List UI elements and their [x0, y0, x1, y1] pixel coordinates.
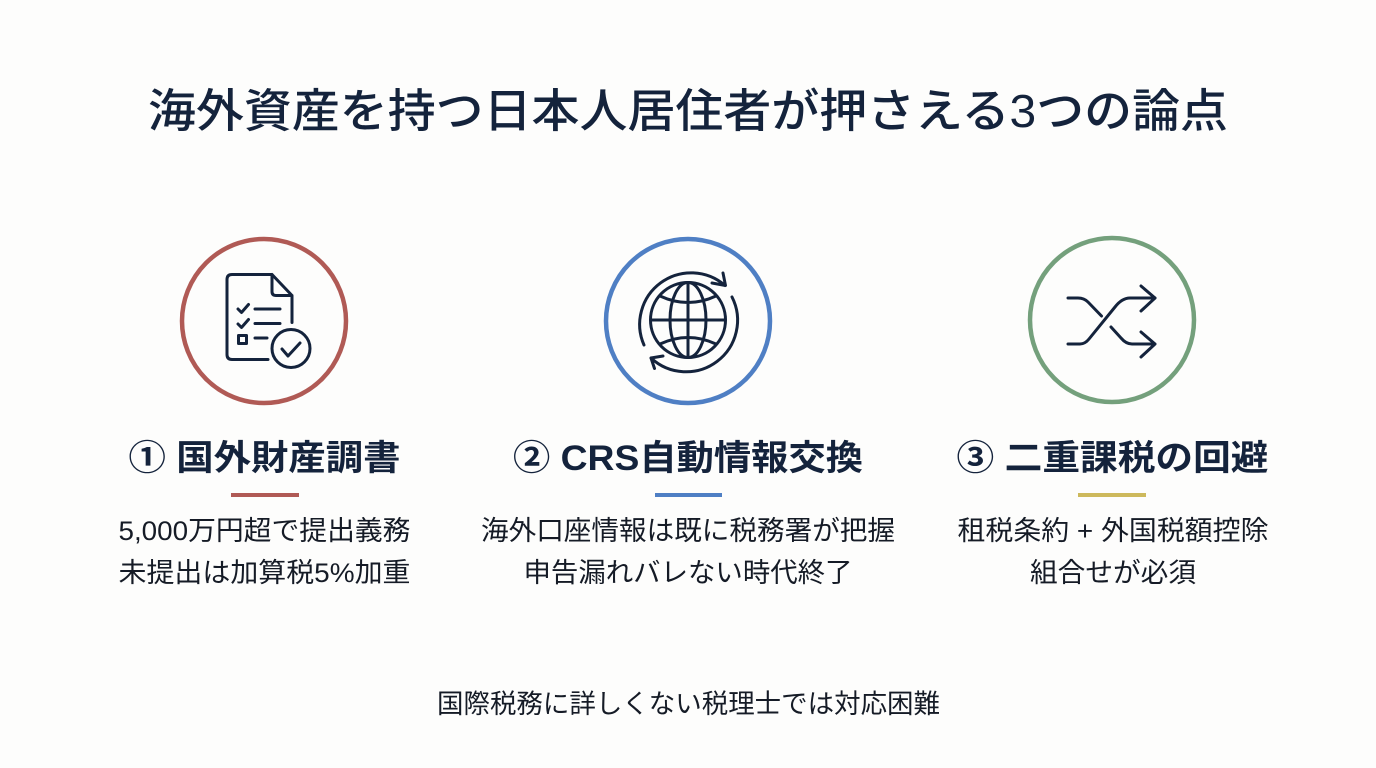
icon: crossing arrows [1030, 238, 1194, 402]
title: 海外資産を持つ日本人居住者が押さえる3つの論点 [148, 85, 1228, 137]
text block: 未提出は加算税5%加重 [118, 558, 410, 588]
panel: 二重課税の回避 [956, 238, 1268, 588]
panel: CRS自動情報交換 [481, 239, 895, 588]
panel: 国外財産調書 [118, 239, 410, 588]
text block: 組合せが必須 [1030, 558, 1196, 588]
accent rule [231, 493, 299, 497]
text block: 申告漏れバレない時代終了 [524, 558, 852, 588]
accent rule [1078, 493, 1146, 497]
text block: 海外口座情報は既に税務署が把握 [481, 516, 895, 546]
icon: document with checklist [182, 239, 346, 403]
icon: globe with rotating arrows [606, 239, 770, 403]
heading: ② CRS自動情報交換 [513, 439, 863, 478]
heading: ① 国外財産調書 [128, 439, 400, 478]
text block [118, 516, 410, 588]
accent rule [655, 493, 722, 497]
text block: 租税条約 + 外国税額控除 [958, 516, 1268, 546]
heading: ③ 二重課税の回避 [956, 439, 1268, 478]
text block: 5,000万円超で提出義務 [118, 516, 410, 546]
footer note: 国際税務に詳しくない税理士では対応困難 [437, 689, 940, 719]
text block [958, 516, 1268, 588]
text block [481, 516, 895, 588]
